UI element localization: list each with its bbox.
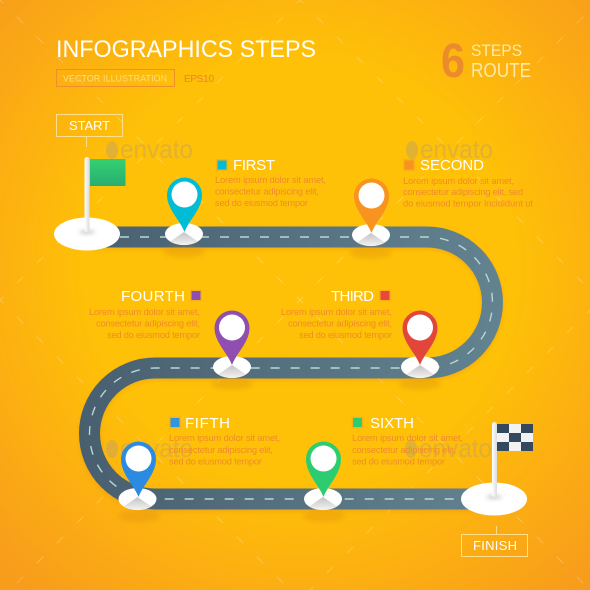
step 5 text: sed do eiusmod tempor bbox=[169, 456, 262, 466]
step 3 text bbox=[281, 288, 392, 340]
step 3 text: THIRD bbox=[331, 288, 374, 305]
step 3 text: consectetur adipiscing elit, bbox=[288, 318, 392, 328]
watermarks: envato bbox=[120, 433, 193, 463]
step 2 text: SECOND bbox=[420, 157, 484, 174]
start label bbox=[56, 114, 122, 147]
watermarks: envato bbox=[420, 134, 493, 164]
tag: vector illustration: VECTOR ILLUSTRATION bbox=[63, 74, 167, 84]
step 4 text bbox=[89, 288, 202, 340]
step 1 text: sed do eiusmod tempor bbox=[215, 198, 308, 208]
start label: START bbox=[69, 118, 110, 133]
step 2 pin bbox=[350, 178, 392, 259]
badge: 6 steps route: 6 bbox=[441, 35, 465, 88]
finish flag bbox=[461, 422, 533, 516]
step 4 text: sed do eiusmod tempor bbox=[107, 330, 200, 340]
step 5 text: FIFTH bbox=[185, 415, 230, 432]
finish label bbox=[462, 526, 528, 556]
step 5 text bbox=[169, 415, 280, 466]
step 2 text: Lorem ipsum dolor sit amet, bbox=[403, 176, 514, 186]
step 6 text: sed do eiusmod tempor bbox=[352, 456, 445, 466]
badge: 6 steps route: STEPS bbox=[471, 41, 522, 60]
watermarks: envato bbox=[120, 134, 193, 164]
title: INFOGRAPHICS STEPS bbox=[56, 36, 316, 63]
step 6 pin bbox=[303, 442, 345, 522]
badge: 6 steps route: ROUTE bbox=[471, 60, 531, 82]
badge: 6 steps route bbox=[441, 35, 531, 88]
watermarks bbox=[106, 134, 493, 463]
step 6 text: SIXTH bbox=[370, 415, 414, 432]
step 5 text: Lorem ipsum dolor sit amet, bbox=[169, 433, 280, 443]
finish label: FINISH bbox=[473, 538, 517, 553]
step 1 text: consectetur adipiscing elit, bbox=[215, 186, 319, 196]
step 6 text bbox=[352, 415, 463, 466]
step 1 text bbox=[215, 157, 326, 208]
step 3 text: sed do eiusmod tempor bbox=[299, 330, 392, 340]
step 4 text: consectetur adipiscing elit, bbox=[96, 318, 200, 328]
step 4 text: FOURTH bbox=[121, 288, 185, 305]
step 2 text: do eiusmod tempor incididunt ut bbox=[403, 198, 533, 208]
step 2 text: consectetur adipiscing elit, sed bbox=[403, 187, 523, 197]
step 4 text: Lorem ipsum dolor sit amet, bbox=[89, 307, 200, 317]
start flag bbox=[54, 157, 126, 250]
watermarks: envato bbox=[419, 433, 492, 463]
step 5 text: consectetur adipiscing elit, bbox=[169, 445, 273, 455]
tag: vector illustration bbox=[56, 70, 174, 86]
step 3 pin bbox=[399, 310, 441, 390]
step 1 text: FIRST bbox=[233, 157, 275, 174]
step 6 text: consectetur adipiscing elit, bbox=[352, 445, 456, 455]
step 6 text: Lorem ipsum dolor sit amet, bbox=[352, 433, 463, 443]
step 1 pin bbox=[163, 178, 205, 258]
tag: EPS10: EPS10 bbox=[184, 74, 214, 85]
step 4 pin bbox=[211, 310, 253, 390]
step 1 text: Lorem ipsum dolor sit amet, bbox=[215, 175, 326, 185]
step 5 pin bbox=[118, 442, 160, 522]
step 3 text: Lorem ipsum dolor sit amet, bbox=[281, 307, 392, 317]
road bbox=[90, 237, 492, 501]
step 2 text bbox=[403, 157, 533, 208]
